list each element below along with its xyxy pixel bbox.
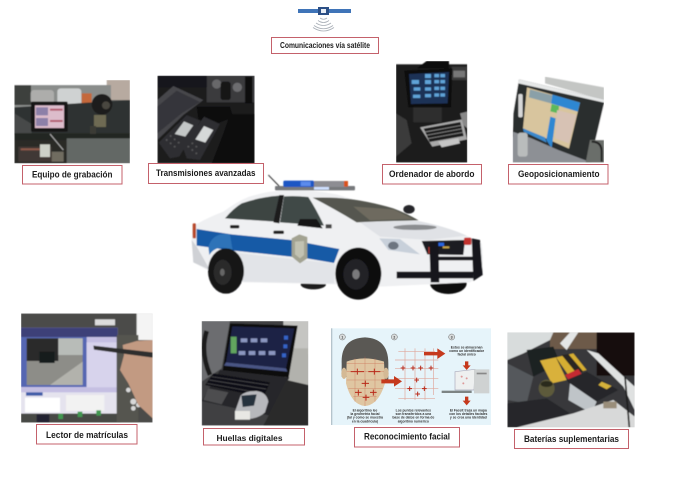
photo: lector de matrículas: [21, 313, 153, 423]
face: [341, 337, 389, 406]
diagram: reconocimiento facial: [331, 328, 491, 425]
badge: [292, 234, 307, 263]
diagram captions: la geometría facial: [350, 412, 380, 416]
photo: huellas digitales: [202, 321, 308, 426]
label: Comunicaciones vía satélite: [272, 38, 378, 54]
rear wheel: [208, 248, 244, 294]
step numbers: 2: [393, 335, 395, 339]
photo: baterías suplementarias: [507, 332, 635, 427]
photo: transmisiones avanzadas: [157, 76, 255, 163]
diagram captions: El algoritmo lee: [353, 408, 378, 412]
label: Lector de matrículas: Lector de matrículas: [46, 430, 128, 441]
label: Geoposicionamiento: Geoposicionamiento: [518, 169, 600, 180]
label: Geoposicionamiento: [508, 164, 608, 184]
body: [192, 190, 483, 287]
step numbers: [339, 334, 455, 340]
photo: geoposicionamiento: [513, 77, 604, 163]
diagram captions: algoritmo numérico: [398, 419, 429, 423]
label: Transmisiones avanzadas: Transmisiones avanzadas: [156, 168, 256, 179]
arrows: [381, 348, 471, 405]
label: Huellas digitales: Huellas digitales: [216, 433, 283, 443]
label: Baterías suplementarias: [514, 430, 628, 448]
diagram captions: con los detalles faciales: [449, 412, 488, 416]
icon: satellite: [298, 7, 351, 31]
label: Baterías suplementarias: Baterías suplementarias: [524, 434, 619, 445]
mirrors: [297, 219, 323, 228]
label: Reconocimiento facial: [354, 428, 460, 447]
diagram captions: y se crea una identidad: [450, 416, 487, 420]
computer: [442, 369, 489, 393]
photo: equipo de grabación: [14, 80, 130, 163]
label: Transmisiones avanzadas: [148, 164, 264, 184]
diagram captions: como un identificador: [449, 349, 485, 353]
label: Reconocimiento facial: Reconocimiento facial: [364, 432, 450, 442]
label: Comunicaciones vía satélite: Comunicaciones vía satélite: [280, 41, 371, 50]
diagram captions: base de datos en forma de: [392, 416, 434, 420]
front wheel: [335, 248, 381, 300]
diagram captions: facial único: [458, 353, 476, 357]
blue stripe: [197, 229, 339, 263]
antenna: [268, 175, 280, 187]
diagram captions: en la cuadrícula): [352, 419, 378, 423]
diagram captions: [347, 345, 488, 423]
push bumper: [397, 238, 483, 282]
label: Equipo de grabación: [22, 166, 122, 184]
label: Lector de matrículas: [36, 424, 137, 444]
label: Equipo de grabación: Equipo de grabación: [32, 170, 113, 180]
far front wheel: [430, 273, 467, 294]
diagram captions: Estos se almacenan: [451, 345, 483, 349]
step numbers: 3: [451, 335, 453, 339]
lightbar: [275, 181, 355, 190]
police car: [192, 175, 483, 300]
diagram captions: Los puntos relevantes: [396, 408, 431, 412]
grid: [395, 348, 438, 400]
windows: [225, 196, 279, 222]
headlight: [379, 238, 420, 254]
grille: [422, 240, 465, 255]
label: Ordenador de abordo: [382, 164, 482, 184]
photo: ordenador de abordo: [396, 61, 467, 163]
door handles: [230, 225, 239, 228]
step numbers: 1: [341, 335, 343, 339]
label: Ordenador de abordo: Ordenador de abordo: [389, 169, 475, 180]
diagram captions: El FaceIt traza un mapa: [450, 408, 487, 412]
diagram captions: (tal y como se muestra: [347, 416, 383, 420]
label: Huellas digitales: [204, 428, 304, 445]
diagram captions: son transferidos a una: [395, 412, 431, 416]
